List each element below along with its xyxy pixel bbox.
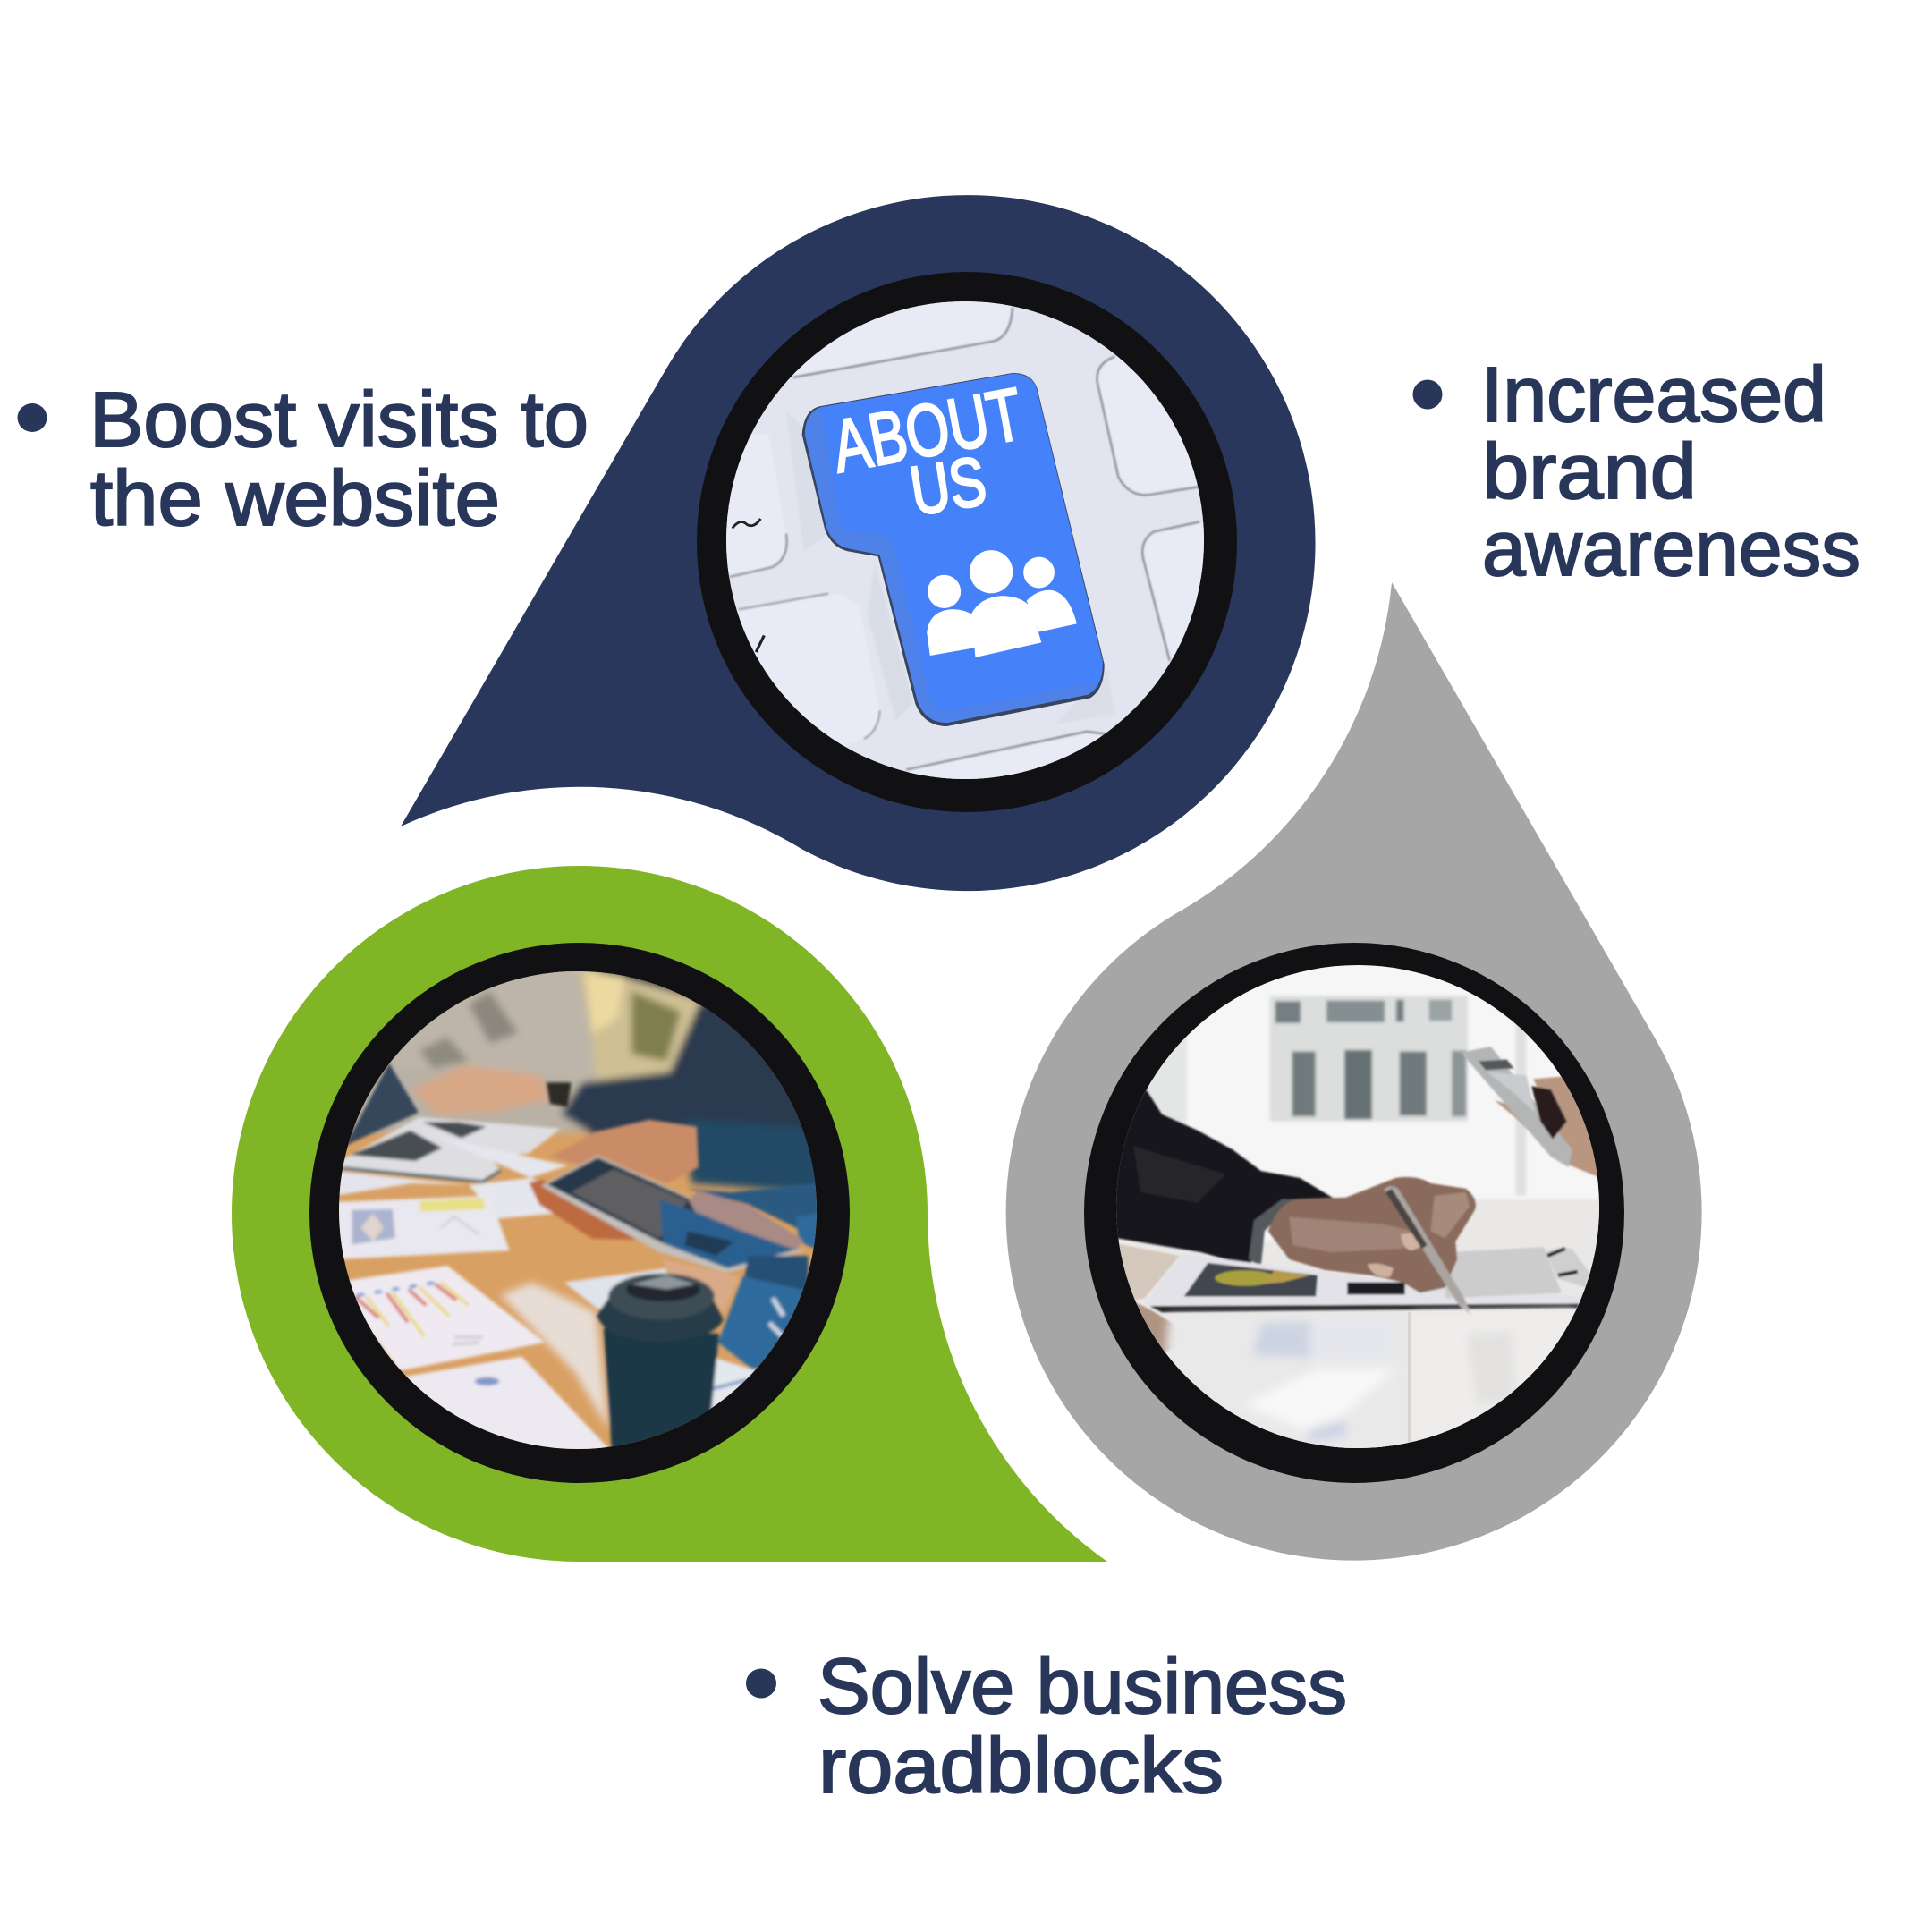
text block: boost visits: the website <box>90 455 500 542</box>
photo: about us keyboard key <box>726 301 1204 779</box>
papers <box>335 1171 469 1196</box>
text block: brand awareness: awareness <box>1482 505 1860 592</box>
text block: boost visits: Boost visits to <box>89 377 589 463</box>
tablet <box>529 1180 642 1240</box>
photo: team reviewing charts at table <box>339 971 817 1449</box>
blue key <box>805 374 1103 723</box>
coffee cup <box>603 1328 719 1453</box>
key glyphs <box>733 519 760 529</box>
photo: hand with pen over documents <box>1116 965 1599 1448</box>
bullet: business roadblocks <box>746 1669 776 1698</box>
ring: navy panel <box>697 272 1237 812</box>
laptop <box>345 1063 419 1146</box>
key label <box>837 386 1018 514</box>
left hand bottom <box>1133 1301 1187 1353</box>
documents <box>1144 1254 1583 1306</box>
text block: business roadblocks: roadblocks <box>818 1723 1224 1809</box>
text block: brand awareness <box>1413 352 1860 592</box>
panel: green teardrop <box>232 866 1107 1562</box>
text block: brand awareness: Increased <box>1481 352 1826 438</box>
ring: green panel <box>309 943 850 1483</box>
bullet: boost visits <box>18 403 47 432</box>
jacket <box>1106 1089 1335 1267</box>
denim sleeves <box>688 1182 817 1231</box>
desk <box>1091 1199 1646 1503</box>
text block: business roadblocks <box>746 1643 1347 1809</box>
text block: brand awareness: brand <box>1482 428 1697 515</box>
panel: navy teardrop <box>401 195 1316 891</box>
hand <box>1268 1177 1476 1293</box>
panel: gray teardrop <box>1006 582 1702 1561</box>
text block: business roadblocks: Solve business <box>818 1643 1347 1730</box>
key shadow <box>802 373 1105 726</box>
infographic canvas <box>18 195 1859 1794</box>
blurred foreground papers <box>1165 1309 1576 1450</box>
icon: group of people <box>927 550 1077 657</box>
key label: ABOUT <box>826 373 1029 488</box>
ring: gray panel <box>1084 943 1624 1483</box>
text block: boost visits <box>18 377 589 542</box>
key label: US <box>905 443 991 530</box>
phone and right hand <box>1495 1075 1600 1178</box>
bullet: brand awareness <box>1413 379 1442 410</box>
hand on tablet <box>689 1191 803 1250</box>
clip <box>1546 1248 1590 1288</box>
pen <box>1384 1186 1471 1316</box>
